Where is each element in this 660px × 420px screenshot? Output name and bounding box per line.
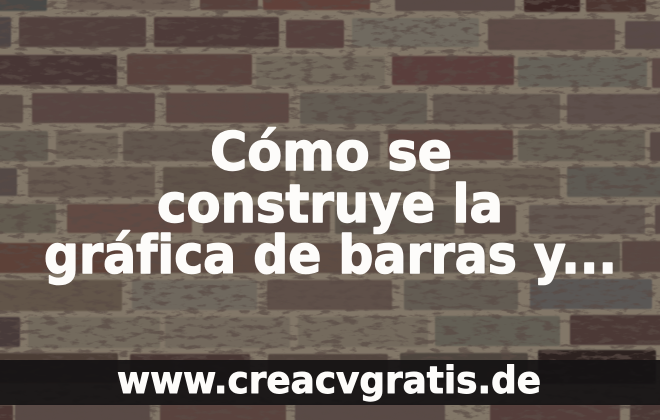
title	[44, 122, 617, 286]
footer website url: www.creacvgratis.de	[117, 359, 541, 402]
title: construye la	[157, 174, 503, 235]
title: gráfica de barras y...	[44, 225, 617, 286]
footer band	[0, 360, 660, 405]
title: Cómo se	[210, 122, 452, 183]
